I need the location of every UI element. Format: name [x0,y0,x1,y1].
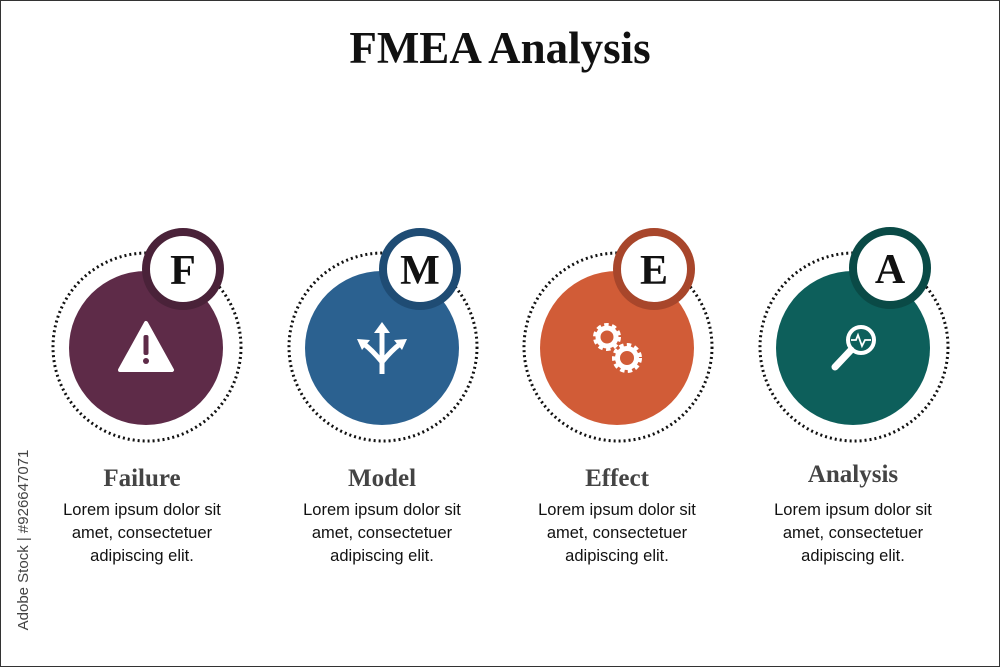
heading: Effect [585,465,650,492]
text block: amet, consectetuer [312,524,453,542]
icon: warning [120,323,172,370]
text block: Lorem ipsum dolor sit [63,501,221,519]
panel: failure [53,232,241,565]
icon: split arrows [364,330,400,374]
title: FMEA Analysis [349,23,651,73]
text block: adipiscing elit. [801,547,905,565]
heading: Model [348,465,416,492]
badge A [853,231,927,305]
text block: amet, consectetuer [72,524,213,542]
text block: Lorem ipsum dolor sit [538,501,696,519]
text block: Lorem ipsum dolor sit [303,501,461,519]
watermark: stock id: Adobe Stock | #926647071 [15,450,32,630]
heading: Analysis [808,461,898,488]
panel: model [289,232,477,565]
text block: Lorem ipsum dolor sit [774,501,932,519]
badge E: E [640,248,668,294]
badge M: M [400,248,440,294]
text block: amet, consectetuer [547,524,688,542]
text block: adipiscing elit. [565,547,669,565]
text block: amet, consectetuer [783,524,924,542]
panel: analysis [760,231,948,565]
badge F: F [170,248,196,294]
icon: gears [596,326,639,370]
badge F [146,232,220,306]
panel: effect [524,232,712,565]
badge A: A [875,247,906,293]
text block: adipiscing elit. [330,547,434,565]
badge M [383,232,457,306]
icon: magnifier [835,327,874,367]
heading: Failure [103,465,181,492]
badge E [617,232,691,306]
text block: adipiscing elit. [90,547,194,565]
